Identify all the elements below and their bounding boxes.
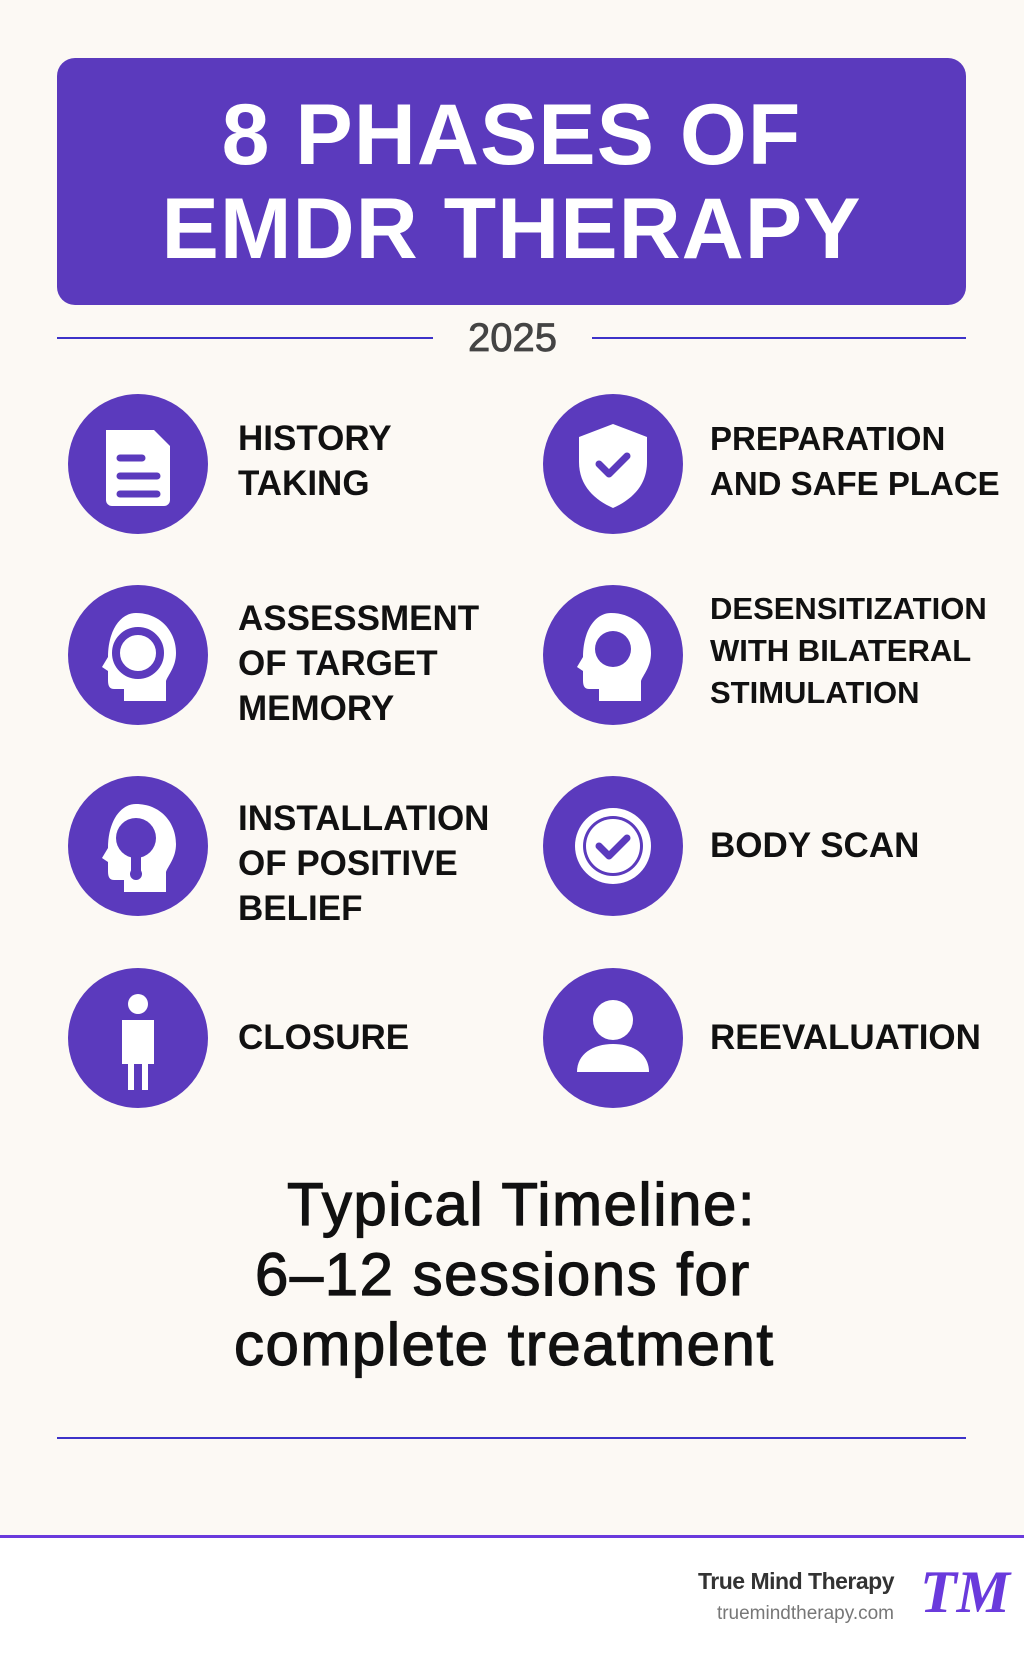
title banner: EMDR THERAPY <box>161 181 862 277</box>
phase: body scan <box>543 776 919 916</box>
phase: history taking <box>68 394 392 534</box>
phase: preparation: PREPARATION <box>710 420 945 457</box>
year subtitle with rules: 2025 <box>468 316 557 360</box>
phase: preparation: AND SAFE PLACE <box>710 465 1000 502</box>
timeline text: complete treatment <box>234 1311 775 1378</box>
logo: TM: TM <box>920 1559 1010 1625</box>
icon: head with target <box>68 585 208 725</box>
phase: history taking: HISTORY <box>238 419 392 458</box>
phase: reevaluation <box>543 968 981 1108</box>
phase: preparation <box>543 394 1000 534</box>
phase: installation: INSTALLATION <box>238 799 489 838</box>
phase: reevaluation: REEVALUATION <box>710 1018 981 1057</box>
footer brand text: True Mind Therapy <box>698 1568 894 1594</box>
phase: closure: CLOSURE <box>238 1018 409 1057</box>
timeline text: Typical Timeline: <box>287 1171 756 1238</box>
footer brand text <box>698 1568 894 1624</box>
title banner: 8 PHASES OF <box>222 87 801 183</box>
icon: person <box>68 968 208 1108</box>
phase: installation: OF POSITIVE <box>238 844 458 883</box>
phase: assessment: OF TARGET <box>238 644 438 683</box>
phase: installation: BELIEF <box>238 889 362 928</box>
phase: assessment: ASSESSMENT <box>238 599 479 638</box>
timeline text <box>234 1171 775 1378</box>
phase: body scan: BODY SCAN <box>710 826 919 865</box>
phase: desensitization <box>543 585 987 725</box>
phase: desensitization: STIMULATION <box>710 675 920 710</box>
icon: check circle <box>543 776 683 916</box>
phase: history taking: TAKING <box>238 464 370 503</box>
phase: desensitization: DESENSITIZATION <box>710 591 987 626</box>
timeline text: 6–12 sessions for <box>255 1241 751 1308</box>
phase: assessment <box>68 585 479 728</box>
footer brand text: truemindtherapy.com <box>717 1603 894 1624</box>
phase: desensitization: WITH BILATERAL <box>710 633 971 668</box>
icon: head with bulb <box>68 776 208 916</box>
icon: document <box>68 394 208 534</box>
bottom rule <box>57 1437 966 1439</box>
icon: shield <box>543 394 683 534</box>
icon: head <box>543 585 683 725</box>
phase: installation <box>68 776 489 928</box>
phase: closure <box>68 968 409 1108</box>
footer <box>0 1535 1024 1666</box>
phase: assessment: MEMORY <box>238 689 394 728</box>
icon: user <box>543 968 683 1108</box>
title banner <box>57 58 966 305</box>
